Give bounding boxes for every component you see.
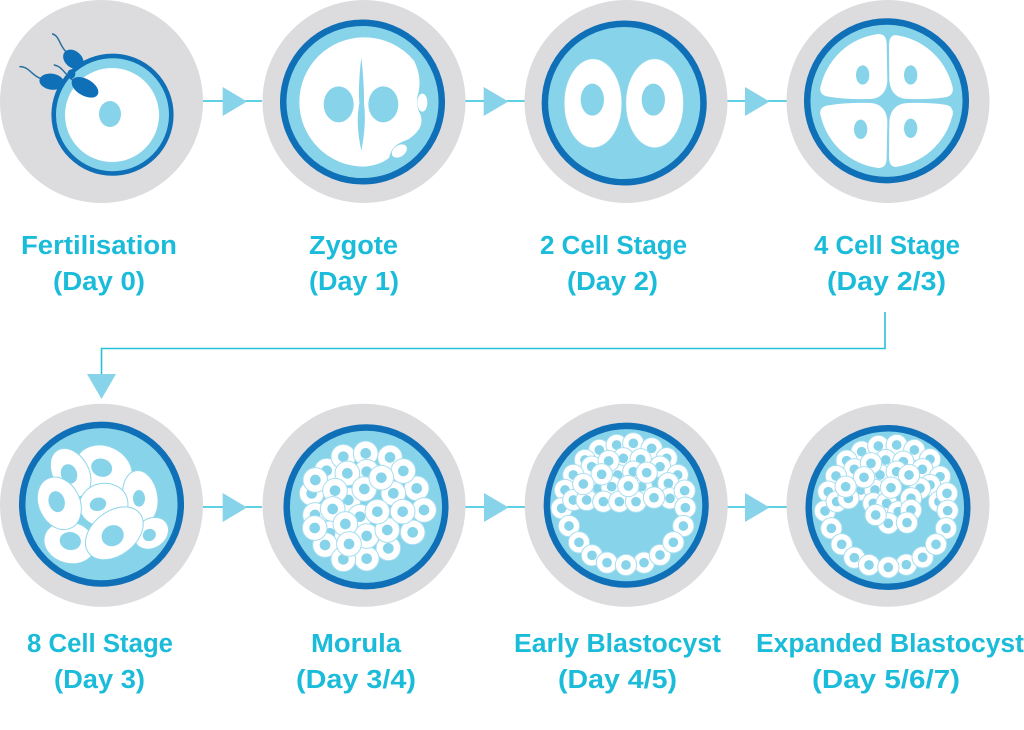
arrow: fertilisation to zygote bbox=[203, 87, 262, 116]
four nuclei bbox=[854, 65, 917, 139]
connector lines and arrows bbox=[87, 87, 885, 522]
label: Fertilisation bbox=[21, 232, 177, 296]
label: Morula: Morula bbox=[311, 630, 402, 658]
label: Expanded Blastocyst: (Day 5/6/7) bbox=[812, 666, 960, 694]
label: 8 Cell Stage bbox=[27, 630, 173, 694]
arrow: early to expanded blastocyst bbox=[727, 493, 787, 522]
right cell bbox=[626, 59, 684, 148]
label: Morula bbox=[296, 630, 416, 694]
label: 2 Cell Stage bbox=[540, 232, 687, 296]
arrow: 8 cell to morula bbox=[203, 493, 262, 522]
label: 2 Cell Stage: 2 Cell Stage bbox=[540, 232, 687, 260]
label: Fertilisation: Fertilisation bbox=[21, 232, 177, 260]
label: Fertilisation: (Day 0) bbox=[53, 268, 145, 296]
nuclei and spindle bbox=[324, 57, 398, 151]
label: Expanded Blastocyst: Expanded Blastocyst bbox=[756, 630, 1024, 658]
label: Zygote bbox=[309, 232, 399, 296]
arrow: 4 cell down to 8 cell bbox=[87, 312, 885, 399]
left cell bbox=[564, 59, 622, 148]
label: Early Blastocyst bbox=[514, 630, 722, 694]
arrow: zygote to 2 cell bbox=[465, 87, 525, 116]
panel: morula illustration bbox=[262, 404, 466, 607]
label: Zygote: Zygote bbox=[309, 232, 398, 260]
panel: 4 cell stage illustration bbox=[786, 0, 990, 203]
cell cluster and cavity ring bbox=[551, 433, 696, 576]
label: Morula: (Day 3/4) bbox=[296, 666, 416, 694]
arrow: 2 cell to 4 cell bbox=[727, 87, 787, 116]
eight cells bbox=[29, 436, 175, 571]
label: Expanded Blastocyst bbox=[756, 630, 1024, 694]
panel: 8 cell stage illustration bbox=[0, 404, 203, 607]
cell cluster and cavity ring bbox=[814, 434, 958, 578]
panel: early blastocyst illustration bbox=[525, 404, 728, 607]
label: Early Blastocyst: (Day 4/5) bbox=[558, 666, 677, 694]
polar bodies bbox=[389, 94, 427, 160]
label: 8 Cell Stage: (Day 3) bbox=[54, 666, 145, 694]
panel: 2 cell stage illustration bbox=[524, 0, 728, 203]
label: 4 Cell Stage: 4 Cell Stage bbox=[814, 232, 960, 260]
label: 8 Cell Stage: 8 Cell Stage bbox=[27, 630, 173, 658]
panel: expanded blastocyst illustration bbox=[786, 404, 990, 607]
label: 4 Cell Stage bbox=[814, 232, 960, 296]
icon: sperm cells bbox=[20, 34, 102, 102]
four cells bbox=[820, 34, 953, 168]
label: Zygote: (Day 1) bbox=[309, 268, 399, 296]
zygote cell body bbox=[299, 37, 421, 167]
panel: fertilisation illustration bbox=[0, 0, 203, 203]
label: Early Blastocyst: Early Blastocyst bbox=[514, 630, 722, 658]
label: 4 Cell Stage: (Day 2/3) bbox=[827, 268, 946, 296]
arrow: morula to early blastocyst bbox=[465, 493, 525, 522]
panel: zygote illustration bbox=[262, 0, 466, 203]
cell cluster bbox=[299, 441, 436, 572]
label: 2 Cell Stage: (Day 2) bbox=[567, 268, 658, 296]
